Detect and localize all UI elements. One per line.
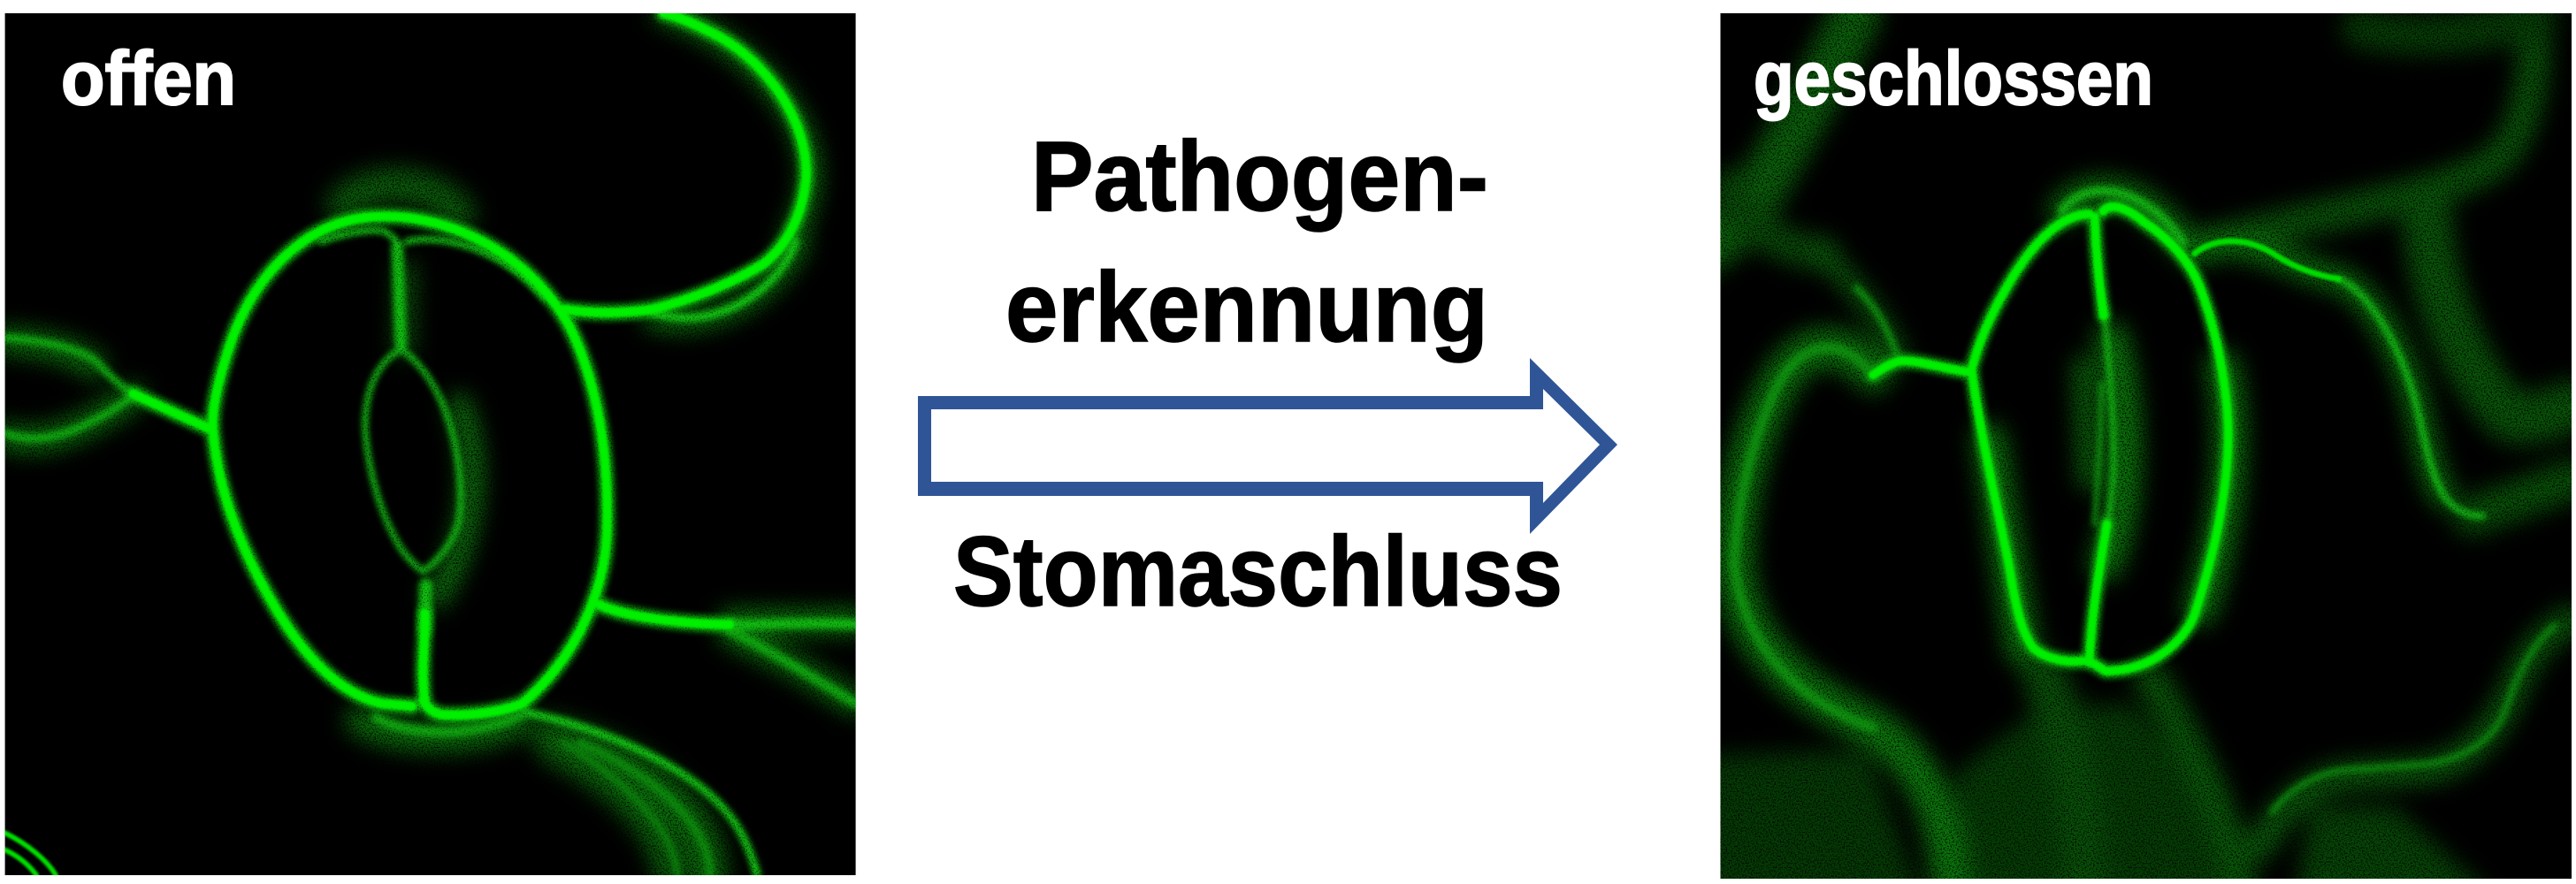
- glow edge of bright walls: [134, 13, 806, 715]
- micrograph: open stoma: [5, 13, 856, 875]
- bright guard cell outlines: [1873, 207, 2228, 671]
- right neighbouring cell wall: [2195, 241, 2339, 279]
- heading: Pathogen-: Pathogen-: [1031, 121, 1488, 232]
- micrograph: closed stoma: [1721, 13, 2572, 879]
- glow edge of bright walls: [1873, 207, 2228, 671]
- heading: erkennung: erkennung: [1005, 252, 1488, 362]
- diffuse background fluorescence: [1707, 13, 2572, 884]
- bottom-left corner cell: [5, 833, 56, 875]
- heading: Stomaschluss: Stomaschluss: [953, 516, 1563, 627]
- halo around the cell walls: [5, 13, 856, 875]
- label: offen: offen: [61, 36, 236, 121]
- panel: centre text and arrow: [918, 121, 1617, 627]
- cell wall lines, medium: [5, 231, 856, 875]
- panel: geschlossen (closed stoma): [1707, 0, 2576, 884]
- medium cell walls: [1734, 191, 2555, 812]
- panel: offen (open stoma): [1, 0, 884, 884]
- bright cell wall lines: [134, 13, 806, 715]
- label: geschlossen: geschlossen: [1754, 36, 2153, 121]
- arrow: block arrow pointing right: [918, 358, 1617, 534]
